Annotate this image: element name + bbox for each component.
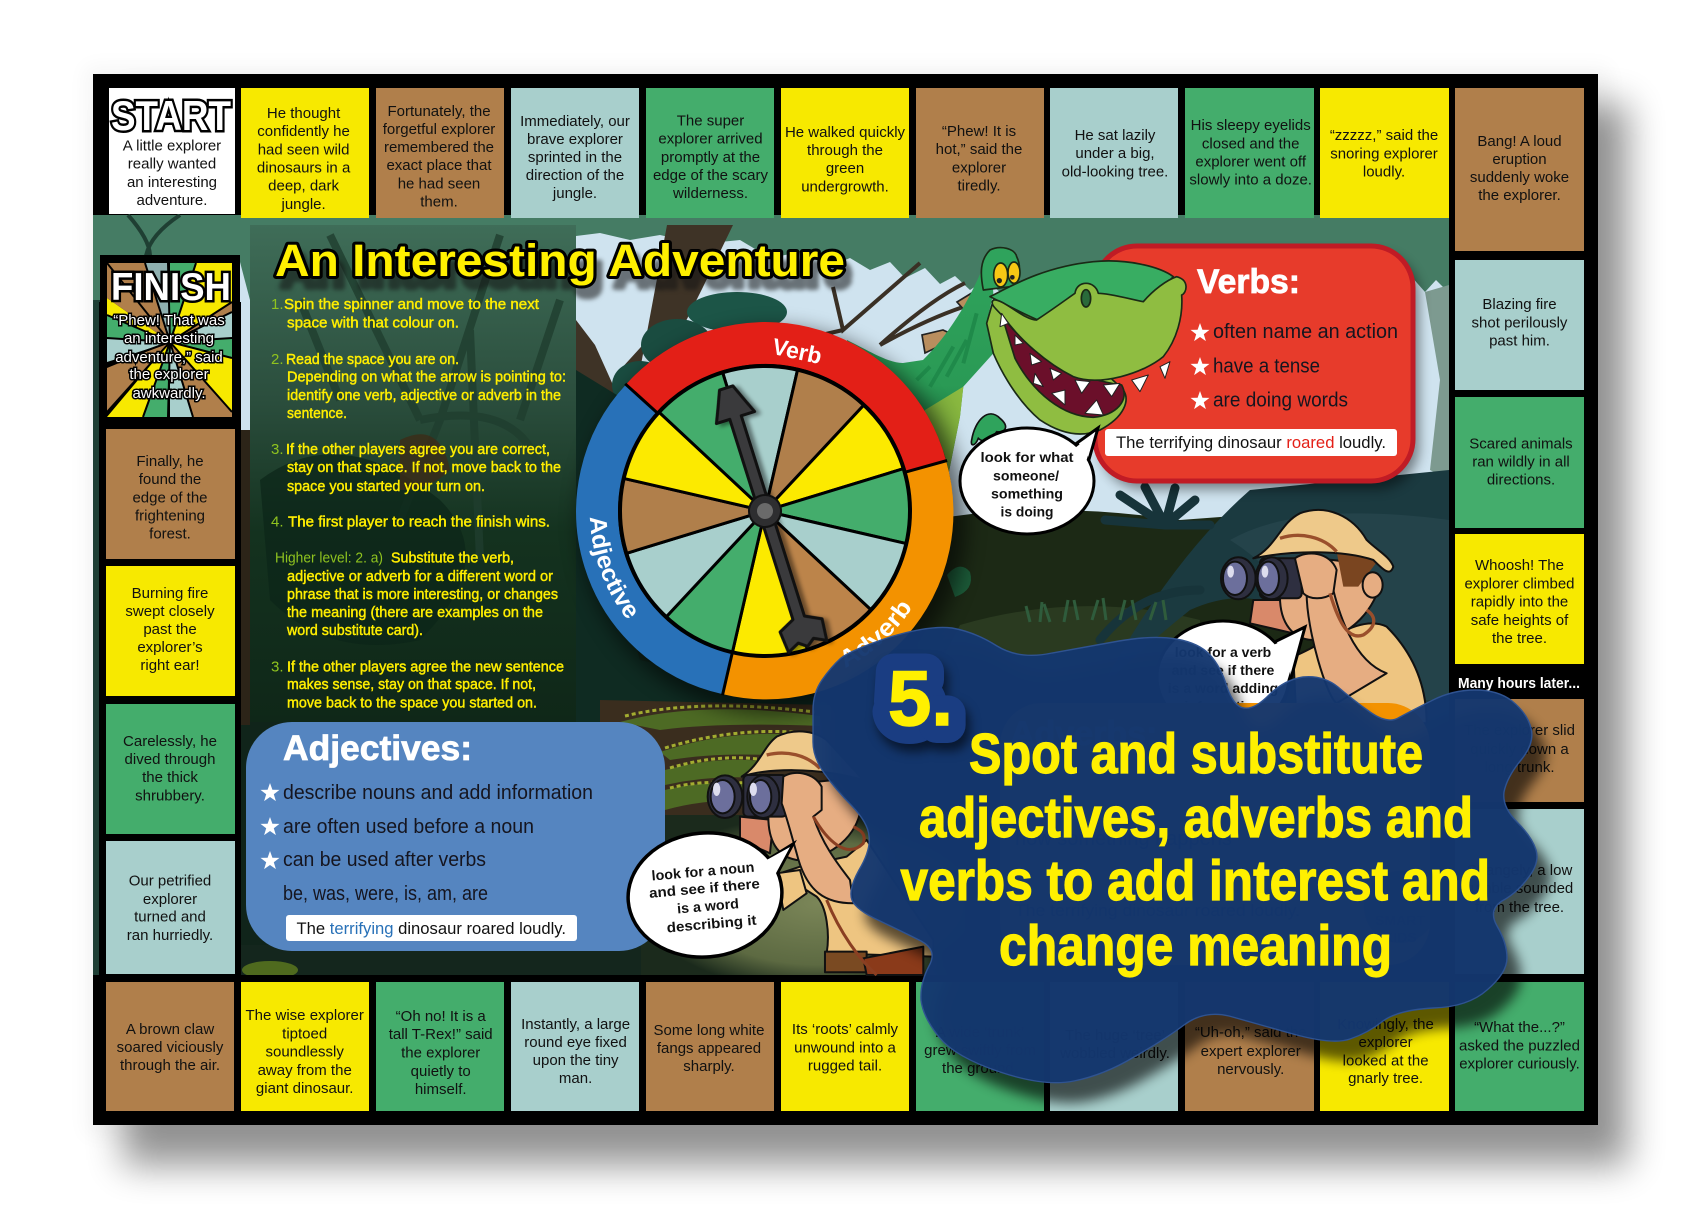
speech bubble: adjectives hint: is a word — [676, 895, 740, 916]
space: promptly — [646, 88, 774, 218]
instructions text: 3. — [271, 441, 284, 458]
outer ring: verb, adverb, adjective — [597, 343, 932, 678]
space: slid: quickly down a — [1470, 741, 1569, 758]
start space: START — [111, 92, 231, 139]
instructions text: Depending on what the arrow is pointing to: — [287, 369, 566, 386]
space: tiredly: “Phew! It is — [942, 123, 1016, 140]
panel: adverbs (behind the blob): KIDS — [1383, 929, 1417, 945]
space: trunk: A wide ‘trunk’ — [936, 1024, 1024, 1041]
speech bubble: verb hint (partly hidden): information — [1184, 698, 1262, 714]
adjective facts list: can be used after verbs — [283, 849, 486, 871]
callout number: 5. — [888, 654, 953, 742]
space: promptly: edge of the scary — [653, 167, 769, 184]
label: adjective: Adjective — [589, 518, 636, 618]
jungle background scene — [93, 215, 1449, 996]
verb facts list — [1190, 321, 1398, 412]
space: blazing — [1455, 260, 1584, 390]
space: petrified: turned and — [134, 908, 206, 926]
space: lazily: old-looking tree. — [1062, 164, 1168, 180]
corner space: bang: eruption — [1492, 151, 1547, 168]
instructions text: If the other players agree you are correct, — [286, 441, 550, 458]
instructions text: The first player to reach the finish wins. — [288, 514, 550, 531]
space: strangely: from the tree. — [1475, 899, 1564, 916]
space: tiredly: explorer — [952, 160, 1006, 176]
space: confidently: He thought — [267, 105, 341, 122]
space: zzzzz — [1320, 88, 1449, 218]
dinosaur body — [847, 250, 1006, 497]
space: roots: unwound into a — [794, 1040, 897, 1056]
speech bubble: verb hint (partly hidden): is a word adding — [1168, 680, 1278, 696]
adjective facts list: describe nouns and add information — [283, 782, 593, 804]
space: uh-oh: expert explorer — [1201, 1043, 1301, 1060]
space: knowingly: explorer — [1358, 1034, 1413, 1051]
space: huge tree: wobbled weirdly. — [1059, 1045, 1170, 1062]
space: uh-oh — [1185, 982, 1314, 1111]
callout heading: change meaning — [999, 914, 1392, 978]
space: t-rex: the explorer — [401, 1044, 480, 1062]
space: scared: Scared animals — [1469, 436, 1573, 452]
instructions text: adjective or adverb for a different word or — [287, 568, 553, 585]
space: confidently: confidently he — [257, 123, 350, 140]
instructions text: 2. — [271, 351, 284, 368]
instructions text: Substitute the verb, — [391, 550, 514, 567]
space: tiptoed: soundlessly — [266, 1044, 344, 1060]
callout heading: adjectives, adverbs and — [919, 786, 1473, 850]
space: roots: rugged tail. — [808, 1058, 882, 1074]
space: trunk — [916, 982, 1044, 1111]
dinosaur head — [981, 248, 1186, 434]
space: fangs — [646, 982, 774, 1111]
speech bubble: verb hint (partly hidden) — [1157, 621, 1305, 733]
space: tiptoed: The wise explorer — [246, 1007, 364, 1024]
space: confidently: dinosaurs in a — [257, 160, 351, 176]
title: An Interesting Adventure — [275, 235, 845, 286]
spinner arrow — [705, 381, 829, 653]
space: knowingly: looked at the — [1343, 1052, 1429, 1070]
space: roots — [781, 982, 909, 1111]
space: tiptoed: giant dinosaur. — [256, 1080, 353, 1097]
bottom black band — [93, 975, 1449, 1125]
corner space: bang: the explorer. — [1478, 187, 1561, 204]
finish space: the explorer — [129, 366, 209, 383]
instructions text: move back to the space you started on. — [287, 695, 537, 712]
speech bubble: verbs hint: look for what — [980, 449, 1074, 465]
space: zzzzz: snoring explorer — [1330, 146, 1438, 162]
finish space: an interesting — [124, 330, 214, 347]
blob callout — [813, 627, 1551, 1103]
space: quickly: He walked quickly — [785, 124, 906, 141]
space: fangs: sharply. — [683, 1058, 735, 1075]
space: tiredly: tiredly. — [957, 178, 1001, 194]
instructions text: 3. — [271, 659, 284, 676]
start space: really wanted — [128, 156, 216, 172]
speech bubble: verb hint (partly hidden): and see if there — [1172, 662, 1275, 678]
space: lazily: He sat lazily — [1075, 127, 1156, 144]
space: fangs: fangs appeared — [657, 1040, 761, 1057]
space: burning — [106, 566, 235, 696]
space: slid — [1455, 699, 1584, 802]
finish space: adventure,” said — [115, 349, 223, 366]
speech bubble: adjectives hint — [623, 827, 793, 963]
big leaves — [1100, 470, 1449, 720]
space: eye: Instantly, a large — [521, 1016, 630, 1033]
speech bubble: verbs hint: someone/ — [993, 468, 1059, 484]
space: t-rex: tall T-Rex!” said — [389, 1026, 493, 1043]
space: finally: found the — [139, 471, 201, 488]
callout heading: verbs to add interest and — [900, 849, 1490, 913]
space: blazing: Blazing fire — [1482, 296, 1557, 313]
start space: adventure. — [137, 192, 207, 209]
space: scared: ran wildly in all — [1472, 454, 1570, 470]
space: tiptoed: away from the — [258, 1062, 352, 1079]
label: many hours later: Many hours later... — [1458, 675, 1580, 692]
space: sleepy: His sleepy eyelids — [1191, 117, 1311, 134]
space: immediately: Immediately, our — [520, 113, 630, 130]
space: confidently: had seen wild — [258, 142, 349, 158]
left column of spaces — [99, 255, 241, 996]
space: knowingly: Knowingly, the — [1337, 1016, 1434, 1033]
space: what the: “What the...?” — [1474, 1019, 1565, 1036]
space: strangely: Strangely, a low — [1467, 862, 1572, 879]
panel: adverbs (behind the blob): Adverbs: — [1010, 715, 1157, 753]
top row of spaces — [109, 88, 1584, 251]
space: petrified: Our petrified — [129, 872, 211, 890]
label: adverb: Adverb — [843, 602, 910, 668]
panel: adverbs (behind the blob): The terrifying dinosaur roared loudly. — [1015, 901, 1300, 920]
space: claw: soared viciously — [117, 1039, 224, 1056]
start space: A little explorer — [123, 138, 221, 154]
space: promptly: explorer arrived — [658, 130, 763, 148]
instructions text: Read the space you are on. — [286, 351, 459, 368]
instructions text: 1. — [271, 296, 284, 313]
space: whoosh — [1455, 534, 1584, 664]
instructions text: identify one verb, adjective or adverb in the — [287, 387, 561, 404]
space: quickly — [781, 88, 909, 218]
space: sleepy: explorer went off — [1195, 154, 1307, 170]
space: fortunately: Fortunately, the — [387, 103, 491, 120]
instructions text: makes sense, stay on that space. If not, — [287, 676, 536, 693]
space: burning: past the — [143, 621, 197, 638]
space: tiredly: hot,” said the — [936, 141, 1022, 158]
right column of spaces — [1455, 260, 1584, 974]
callout heading: Spot and substitute — [969, 722, 1423, 786]
space: whoosh: Whoosh! The — [1475, 557, 1564, 574]
space: tiredly — [916, 88, 1044, 218]
speech bubble: verbs hint: something — [991, 486, 1063, 502]
space: strangely: rumble sounded — [1466, 880, 1573, 897]
verb example sentence: The terrifying dinosaur roared loudly. — [1116, 433, 1386, 452]
verb facts list: have a tense — [1213, 356, 1320, 378]
space: confidently: jungle. — [280, 196, 326, 213]
space: carelessly: shrubbery. — [135, 788, 205, 804]
space: knowingly — [1320, 982, 1449, 1111]
space: whoosh: explorer climbed — [1464, 576, 1575, 592]
instructions text: Higher level: 2. a) — [275, 550, 383, 567]
space: confidently: deep, dark — [268, 178, 340, 194]
verb example sentence — [1105, 429, 1397, 456]
space: fortunately: them. — [420, 194, 458, 210]
space: eye — [511, 982, 639, 1111]
space: strangely — [1455, 809, 1584, 974]
space: huge tree: The huge ‘tree’ — [1065, 1027, 1165, 1044]
space: quickly: green — [826, 160, 864, 177]
space: huge tree — [1050, 982, 1178, 1111]
space: fortunately: exact place that — [386, 157, 492, 174]
space: roots: Its ‘roots’ calmly — [792, 1021, 899, 1038]
speech bubble: adjectives hint: describing it — [666, 912, 757, 935]
adjective example sentence — [286, 915, 577, 941]
space: finally — [106, 429, 235, 559]
hill — [900, 500, 1449, 740]
space: tiptoed: tiptoed — [282, 1026, 327, 1042]
space: eye: round eye fixed — [524, 1034, 627, 1051]
space: finally: frightening — [135, 508, 205, 524]
space: blazing: shot perilously — [1472, 314, 1568, 332]
space: claw: through the air. — [120, 1057, 220, 1074]
heading: adjectives: Adjectives: — [283, 729, 472, 768]
space: trunk: the ground. — [942, 1060, 1018, 1077]
finish space — [107, 263, 232, 417]
space: claw: A brown claw — [126, 1021, 214, 1038]
space: sleepy — [1185, 88, 1314, 218]
speech bubble: verb hint (partly hidden): look for a verb — [1175, 644, 1271, 660]
instructions text: the meaning (there are examples on the — [287, 604, 543, 621]
space: fortunately: he had seen — [398, 176, 480, 192]
space: promptly: wilderness. — [672, 185, 748, 202]
space: immediately: direction of the — [526, 167, 624, 184]
instructions text: space you started your turn on. — [287, 478, 485, 495]
finish space: awkwardly. — [132, 385, 206, 402]
space: fangs: Some long white — [654, 1022, 764, 1039]
speech bubble: adjectives hint: and see if there — [648, 875, 761, 901]
finish space: FINISH — [111, 266, 231, 309]
space: what the: asked the puzzled — [1459, 1038, 1580, 1054]
instructions text: stay on that space. If not, move back to the — [287, 459, 561, 476]
adjective facts list — [260, 782, 593, 905]
callout number: 5. — [888, 654, 953, 742]
instructions text: Spin the spinner and move to the next — [284, 296, 540, 313]
space: knowingly: gnarly tree. — [1348, 1070, 1423, 1087]
panel: adverbs (behind the blob): SMART — [1375, 912, 1425, 928]
space: fortunately: forgetful explorer — [383, 121, 495, 138]
space: carelessly — [106, 704, 235, 834]
space: promptly: The super — [677, 112, 744, 130]
space: scared — [1455, 397, 1584, 528]
spinner wheel — [574, 314, 972, 724]
bottom row of spaces — [106, 982, 1584, 1111]
instructions text: sentence. — [287, 405, 347, 422]
space: tiptoed — [241, 982, 369, 1111]
space: petrified — [106, 841, 235, 974]
space: eye: upon the tiny — [533, 1052, 619, 1069]
start space: an interesting — [127, 174, 217, 191]
space: immediately: sprinted in the — [528, 149, 622, 166]
instructions text: 4. — [271, 514, 284, 531]
instructions text: If the other players agree the new sentence — [287, 659, 564, 676]
space: sleepy: closed and the — [1202, 136, 1299, 152]
instructions text: space with that colour on. — [287, 315, 459, 332]
callout heading — [900, 722, 1490, 978]
speech bubble: adjectives hint: look for a noun — [651, 859, 755, 884]
adjective example sentence: The terrifying dinosaur roared loudly. — [296, 919, 566, 938]
space: finally: edge of the — [132, 490, 208, 506]
space: whoosh: the tree. — [1492, 630, 1547, 647]
corner space: bang: Bang! A loud — [1477, 133, 1562, 150]
space: immediately: brave explorer — [527, 131, 623, 148]
space: sleepy: slowly into a doze. — [1189, 172, 1312, 188]
space: carelessly: the thick — [142, 769, 198, 786]
speech bubble: verbs hint — [960, 428, 1098, 534]
space: immediately — [511, 88, 639, 218]
tree trunk — [576, 225, 733, 430]
space: scared: directions. — [1487, 472, 1555, 488]
space: whoosh: safe heights of — [1471, 612, 1569, 629]
verb facts list: often name an action — [1213, 321, 1398, 343]
space: uh-oh: nervously. — [1217, 1061, 1284, 1078]
start space — [109, 88, 235, 214]
board frame — [93, 74, 1598, 1125]
verb facts list: are doing words — [1213, 390, 1348, 412]
space: t-rex — [376, 982, 504, 1111]
space: eye: man. — [559, 1070, 592, 1087]
space: carelessly: Carelessly, he — [123, 733, 217, 750]
space: burning: Burning fire — [132, 585, 208, 602]
space: petrified: explorer — [143, 891, 197, 908]
log path and moss — [600, 700, 900, 840]
space: finally: Finally, he — [136, 453, 204, 470]
instructions text — [271, 296, 566, 712]
space: what the — [1455, 982, 1584, 1111]
instructions dark panel — [250, 225, 576, 722]
space: t-rex: “Oh no! It is a — [396, 1008, 486, 1025]
space: fortunately — [376, 88, 504, 218]
space: claw — [106, 982, 234, 1111]
space: promptly: promptly at the — [661, 149, 760, 166]
space: zzzzz: “zzzzz,” said the — [1330, 127, 1438, 144]
spinner segments — [620, 366, 910, 656]
explorer with binoculars (lower) — [708, 731, 933, 975]
panel: adjectives — [246, 722, 665, 951]
space: trunk: grew swiftly from — [924, 1042, 1036, 1059]
label: verb: Verb — [770, 333, 824, 369]
space: slid: long trunk. — [1484, 759, 1555, 776]
corner space: bang: suddenly woke — [1470, 169, 1569, 186]
space: whoosh: rapidly into the — [1471, 594, 1568, 610]
space: slid: The explorer slid — [1464, 722, 1575, 739]
space: finally: forest. — [149, 526, 191, 542]
space: confidently — [241, 88, 369, 218]
space: blazing: past him. — [1489, 332, 1550, 350]
space: lazily — [1050, 88, 1178, 218]
space: burning: right ear! — [140, 657, 200, 674]
space: petrified: ran hurriedly. — [127, 927, 213, 944]
panel: adverbs (behind the blob): how something happens — [1015, 828, 1232, 850]
corner space: bang — [1455, 88, 1584, 251]
instructions text: phrase that is more interesting, or changes — [287, 586, 558, 603]
space: what the: explorer curiously. — [1459, 1056, 1580, 1072]
space: uh-oh: “Uh-oh,” said the — [1195, 1024, 1307, 1041]
space: t-rex: himself. — [415, 1081, 467, 1098]
space: quickly: through the — [807, 142, 883, 159]
space: carelessly: dived through — [125, 751, 215, 768]
finish space: “Phew! That was — [113, 312, 225, 329]
space: lazily: under a big, — [1075, 145, 1155, 162]
heading: verbs: Verbs: — [1197, 263, 1300, 301]
panel: verbs — [1095, 246, 1419, 489]
speech bubble: verbs hint: is doing — [1000, 504, 1054, 520]
adjective facts list: are often used before a noun — [283, 816, 534, 838]
space: quickly: undergrowth. — [801, 178, 889, 196]
panel: adverbs (behind the blob) — [1000, 703, 1436, 965]
space: burning: swept closely — [125, 603, 215, 620]
space: fortunately: remembered the — [384, 139, 494, 156]
space: immediately: jungle. — [552, 185, 597, 202]
adjective facts list: be, was, were, is, am, are — [283, 883, 488, 905]
explorer with binoculars (upper right) — [1221, 510, 1427, 723]
space: zzzzz: loudly. — [1363, 164, 1405, 180]
space: burning: explorer’s — [137, 639, 203, 656]
space: t-rex: quietly to — [411, 1063, 471, 1080]
instructions text: word substitute card). — [286, 622, 423, 639]
